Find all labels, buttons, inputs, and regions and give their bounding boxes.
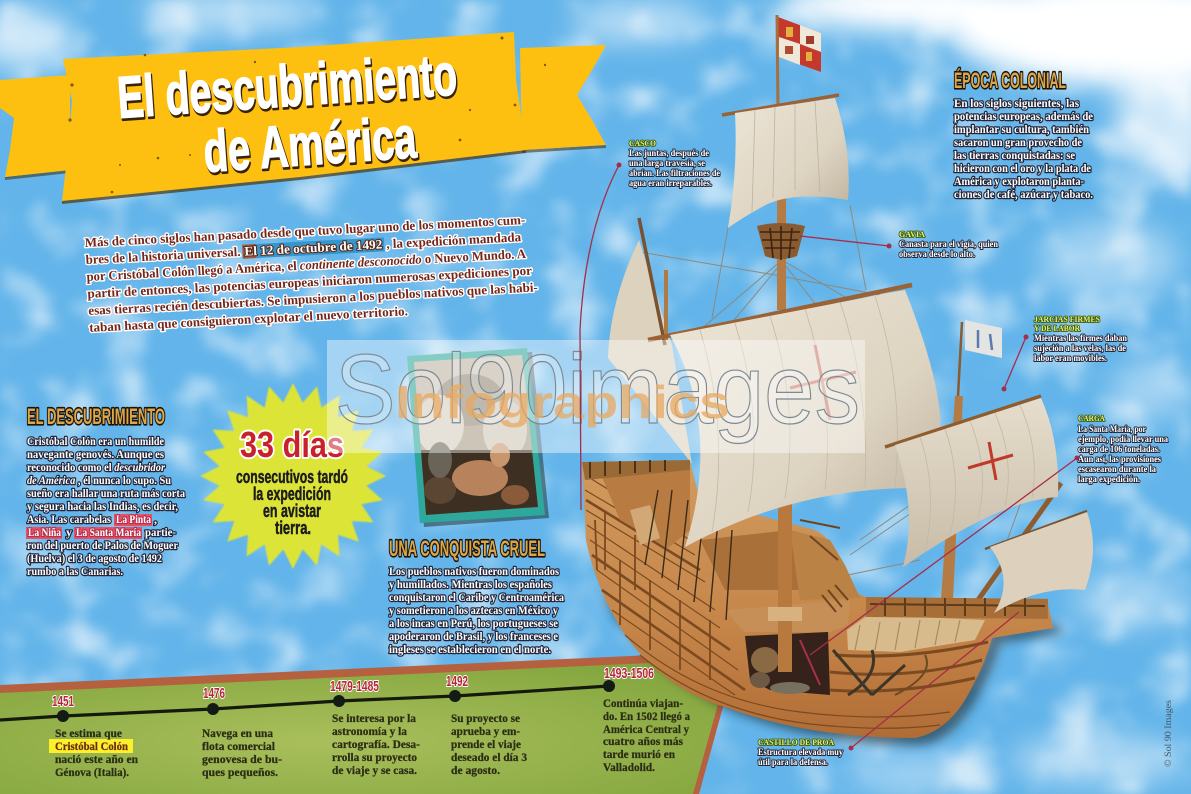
main sail: [670, 290, 941, 547]
callout: carga: La Santa María, por: [1078, 425, 1147, 435]
body text: partie-: [145, 525, 176, 539]
callout lines: [580, 165, 1077, 748]
body text: reconocido como el descubridor: [27, 460, 165, 474]
body text: ,: [154, 512, 157, 526]
body text: La Santa María: [76, 525, 141, 539]
callout dots: [616, 162, 1080, 750]
bowsprit: [978, 483, 1061, 600]
body text: de América , él nunca lo supo. Su: [27, 473, 171, 487]
timeline entry: 1476: flota comercial: [202, 739, 276, 753]
body text: rumbo a las Canarias.: [27, 564, 123, 578]
bowsprit sail: [985, 511, 1093, 613]
title text: de América: [202, 106, 420, 187]
main sail cross: [790, 345, 856, 420]
starburst callout: 33 días: consecutivos tardó: [236, 467, 348, 487]
body text: sacaron un gran provecho de: [954, 135, 1083, 149]
timeline entry: 1451: 1451: [52, 693, 74, 710]
body text: Asia. Las carabelas: [27, 512, 111, 526]
body text: y sometieron a los aztecas en México y: [389, 603, 558, 617]
body text: y segura hacia las Indias, es decir,: [27, 499, 178, 513]
body text: apoderaron de Brasil, y los franceses e: [389, 629, 559, 643]
starburst callout: 33 días: tierra.: [275, 518, 311, 538]
timeline entry: 1492: aprueba y em-: [451, 724, 520, 738]
body text: [27, 434, 185, 578]
callout: gavia: observa desde lo alto.: [899, 250, 975, 260]
timeline entry: 1493-1506: [603, 665, 690, 774]
timeline entry: 1479-1485: cartografía. Desa-: [332, 737, 420, 751]
callout: carga: escasearon durante la: [1078, 465, 1156, 475]
hull shadow: [600, 590, 1061, 745]
body text: las tierras conquistadas: se: [954, 148, 1076, 162]
body text: América y explotaron planta-: [954, 174, 1084, 188]
timeline entry: 1492: [446, 673, 527, 777]
callout: castillo de proa: [758, 737, 843, 768]
timeline entry: 1492: de agosto.: [451, 763, 500, 777]
shrouds: [645, 490, 732, 620]
foremast and small flag: [941, 320, 1002, 600]
timeline entry: 1492: 1492: [446, 673, 468, 690]
anchor: [833, 650, 927, 695]
intro paragraph: , la expedición mandada: [386, 229, 522, 251]
body text: La Pinta: [116, 512, 151, 526]
body text: hicieron con el oro y la plata de: [954, 161, 1092, 175]
body text: ron del puerto de Palos de Moguer: [27, 538, 179, 552]
callout: gavia: Canasta para el vigía, quien: [899, 240, 999, 250]
fore yard: [885, 396, 1041, 447]
body text: Cristóbal Colón era un humilde: [27, 434, 165, 448]
callout: jarcias firmes y de labor: Mientras las firmes daban: [1034, 334, 1128, 344]
timeline panel: [0, 655, 726, 794]
callout: gavia: GAVIA: [899, 229, 926, 239]
body text: navegante genovés. Aunque es: [27, 447, 164, 461]
title text: El descubrimiento: [115, 41, 459, 131]
callout line: casco: [580, 165, 619, 510]
body text: Los pueblos nativos fueron dominados: [389, 564, 559, 578]
body text: En los siglos siguientes, las: [954, 96, 1079, 110]
timeline entry: 1451: Génova (Italia).: [55, 765, 129, 779]
timeline entry: 1493-1506: cuatro años más: [603, 734, 683, 748]
copyright note: © Sol 90 Images: [1163, 700, 1174, 767]
body text: y: [66, 525, 72, 539]
callout: carga: ejemplo, podía llevar una: [1078, 435, 1168, 445]
heading: El descubrimiento: EL DESCUBRIMIENTO: [27, 404, 165, 429]
body text: La Niña: [28, 525, 61, 539]
body text: sueño era hallar una ruta más corta: [27, 486, 185, 500]
intro paragraph: [84, 211, 539, 335]
body text: potencias europeas, además de: [954, 109, 1094, 123]
starburst callout: 33 días: en avistar: [263, 501, 321, 521]
hull: [582, 462, 1053, 738]
timeline entry: 1492: deseado el día 3: [451, 750, 527, 764]
rigging: [640, 205, 1040, 575]
section: Una conquista cruel: [389, 536, 564, 656]
timeline entry: 1492: prende el viaje: [451, 737, 522, 751]
body text: y humillados. Mientras los españoles: [389, 577, 552, 591]
body text: conquistaron el Caribe y Centroamérica: [389, 590, 564, 604]
timeline entry: 1451: [49, 693, 138, 779]
starburst callout: 33 días: [200, 383, 386, 569]
body text: ciones de café, azúcar y tabaco.: [954, 187, 1093, 201]
mainmast: [777, 15, 786, 310]
timeline entry: 1479-1485: 1479-1485: [330, 678, 379, 695]
heading: Una conquista cruel: UNA CONQUISTA CRUEL: [389, 536, 545, 561]
ship illustration: [582, 15, 1093, 745]
timeline entry: 1476: [202, 685, 282, 779]
section: Época colonial: [954, 68, 1094, 201]
timeline entry: 1493-1506: tarde murió en: [603, 747, 675, 761]
fore sail: [895, 398, 1058, 567]
intro paragraph: El 12 de octubre de 1492: [244, 236, 383, 259]
timeline entry: 1476: genovesa de bu-: [202, 752, 282, 766]
callout: jarcias firmes y de labor: JARCIAS FIRMES: [1034, 314, 1100, 324]
callout line: gavia: [800, 236, 889, 246]
callout: carga: larga expedición.: [1078, 475, 1140, 485]
main deck: [700, 520, 860, 632]
timeline entry: 1476: ques pequeños.: [202, 765, 278, 779]
timeline entry: 1451: nació este año en: [55, 752, 138, 766]
callout: jarcias firmes y de labor: [1034, 314, 1128, 364]
starburst callout: 33 días: la expedición: [253, 484, 331, 504]
intro paragraph: Más de cinco siglos han pasado desde que tuvo lugar uno de los momentos cum-: [84, 212, 526, 250]
title text: El descubrimiento: [116, 43, 460, 133]
callout: castillo de proa: útil para la defensa.: [758, 758, 828, 768]
body text: (Huelva) el 3 de agosto de 1492: [27, 551, 162, 565]
callout: casco: [629, 138, 720, 189]
timeline entry: 1479-1485: astronomía y la: [332, 724, 407, 738]
callout: carga: Aun así, las provisiones: [1078, 455, 1161, 465]
timeline entry: 1493-1506: Valladolid.: [603, 760, 655, 774]
intro paragraph: bres de la historia universal.: [85, 244, 241, 267]
section: El descubrimiento: [26, 404, 185, 578]
body text: [389, 564, 564, 656]
callout: jarcias firmes y de labor: sujeción a las velas, las de: [1034, 344, 1126, 354]
timeline entry: 1493-1506: do. En 1502 llegó a: [603, 709, 690, 723]
timeline entry: 1493-1506: 1493-1506: [604, 665, 654, 682]
timeline entry: 1479-1485: [330, 678, 420, 777]
main yard: [648, 285, 912, 340]
callout: casco: CASCO: [629, 138, 656, 148]
body text: [954, 96, 1094, 201]
main mast base: [778, 500, 792, 672]
fore sail cross: [968, 442, 1013, 480]
timeline entry: 1493-1506: América Central y: [603, 722, 689, 736]
callout: castillo de proa: CASTILLO DE PROA: [758, 737, 835, 747]
watermark band: Sol90images: [335, 334, 860, 444]
callout line: carga: [810, 458, 1077, 655]
intro paragraph: esas tierras recién descubiertas. Se impusieron a los pueblos nativos que las habi-: [88, 279, 538, 318]
callout: casco: abrían. Las filtraciones de: [629, 169, 720, 179]
timeline entry: 1451: Se estima que: [55, 726, 123, 740]
flag on mainmast: [778, 17, 821, 72]
aft lateen sail: [608, 218, 692, 464]
intro paragraph: taban hasta que consiguieron explotar el nuevo territorio.: [89, 303, 408, 335]
cargo hold cutaway: [745, 632, 830, 695]
title text: de América: [201, 104, 419, 185]
timeline axis: [0, 686, 609, 720]
body text: a los incas en Perú, los portugueses se: [389, 616, 559, 630]
top sail: [728, 98, 849, 228]
timeline entry: 1451: Cristóbal Colón: [55, 739, 128, 753]
callout line: castillo de proa: [851, 612, 1019, 748]
callout line: jarcias: [1004, 337, 1026, 389]
timeline entry: 1479-1485: de viaje y se casa.: [332, 763, 417, 777]
top yard: [722, 95, 839, 115]
crow's nest: [757, 223, 805, 260]
timeline entry: 1476: Navega en una: [202, 726, 273, 740]
starburst callout: 33 días: 33 días: [240, 424, 344, 465]
body text: implantar su cultura, también: [954, 122, 1089, 136]
body text: ingleses se establecieron en el norte.: [389, 642, 551, 656]
forecastle: [847, 597, 1048, 652]
callout: carga: carga de 106 toneladas.: [1078, 445, 1160, 455]
title text: [115, 41, 460, 187]
timeline entry: 1476: 1476: [203, 685, 225, 702]
framed painting: [407, 348, 549, 527]
callout: casco: Las juntas, después de: [629, 149, 709, 159]
callout: carga: [1078, 413, 1168, 485]
timeline entry: 1479-1485: Se interesa por la: [332, 711, 416, 725]
intro paragraph: partir de entonces, las potencias europeas iniciaron numerosas expediciones por: [87, 263, 532, 301]
intro paragraph: por Cristóbal Colón llegó a América, el continente desconocido o Nuevo Mundo. A: [86, 246, 527, 284]
heading: Época colonial: ÉPOCA COLONIAL: [954, 68, 1066, 93]
hull planking: [585, 475, 988, 728]
stern castle interior: [582, 460, 690, 548]
callout: jarcias firmes y de labor: labor eran movibles.: [1034, 354, 1107, 364]
watermark band: Infographics: [395, 376, 730, 428]
callout: castillo de proa: Estructura elevada muy: [758, 748, 843, 758]
ship name highlights: [26, 514, 152, 539]
timeline entry: 1492: Su proyecto se: [451, 711, 521, 725]
callout: gavia: [899, 229, 999, 260]
title banner: [0, 32, 606, 204]
callout: jarcias firmes y de labor: Y DE LABOR: [1034, 323, 1081, 333]
callout: casco: una larga travesía, se: [629, 159, 705, 169]
date highlight: [242, 237, 385, 259]
callout: carga: CARGA: [1078, 413, 1106, 423]
timeline entry: 1479-1485: rrolla su proyecto: [332, 750, 417, 764]
timeline entry: 1493-1506: Continúa viajan-: [603, 696, 683, 710]
callout: casco: agua eran irreparables.: [629, 179, 712, 189]
